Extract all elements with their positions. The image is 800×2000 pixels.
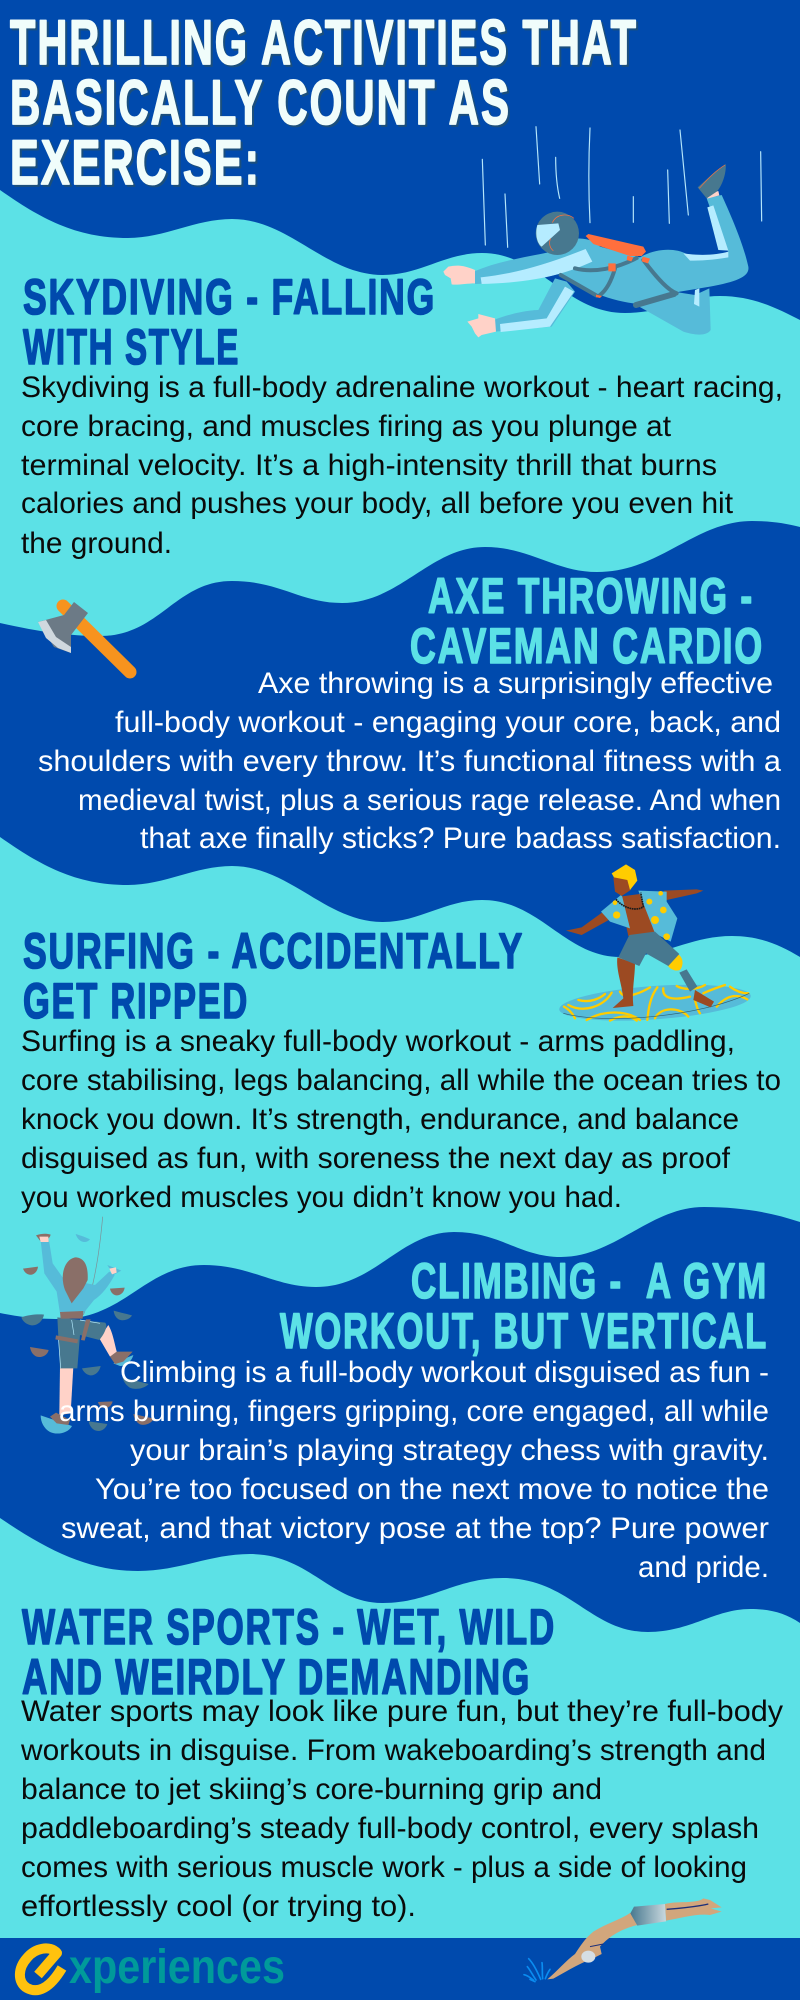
body text: climbing: arms burning, fingers gripping, core engaged, all while xyxy=(59,1395,769,1428)
legs and arms xyxy=(613,957,635,1008)
arm and torso xyxy=(41,1241,115,1313)
body text: water sports: Water sports may look like pure fun, but they’re full-body xyxy=(21,1695,783,1728)
body text: skydiving xyxy=(21,371,783,560)
heading: surfing: GET RIPPED xyxy=(23,973,249,1029)
heading: surfing: SURFING - ACCIDENTALLY xyxy=(23,923,524,979)
body text: axe throwing: full-body workout - engaging your core, back, and xyxy=(115,706,781,739)
body text: surfing: knock you down. It’s strength, endurance, and balance xyxy=(21,1103,739,1136)
heading: skydiving: SKYDIVING - FALLING xyxy=(23,269,436,325)
body text: water sports: balance to jet skiing’s core-burning grip and xyxy=(21,1773,602,1806)
panel: climbing xyxy=(59,1253,769,1584)
title: BASICALLY COUNT AS xyxy=(10,68,511,138)
body text: skydiving: Skydiving is a full-body adrenaline workout - heart racing, xyxy=(21,371,783,404)
body text: climbing xyxy=(59,1356,769,1584)
body text: water sports xyxy=(20,1695,783,1923)
body text: skydiving: calories and pushes your body, all before you even hit xyxy=(21,487,734,520)
swim cap xyxy=(581,1951,595,1963)
shorts xyxy=(618,932,679,966)
surfboard xyxy=(558,979,752,1026)
harness xyxy=(55,1311,91,1343)
helmet xyxy=(536,212,579,255)
panel: skydiving xyxy=(21,269,783,560)
harness xyxy=(561,258,677,305)
illustration: climber xyxy=(21,1217,154,1434)
body text: water sports: effortlessly cool (or trying to). xyxy=(21,1890,416,1923)
body text: axe throwing: shoulders with every throw. It’s functional fitness with a xyxy=(38,745,781,778)
title xyxy=(10,8,638,198)
body text: surfing: core stabilising, legs balancing, all while the ocean tries to xyxy=(21,1064,781,1097)
parachute pack xyxy=(586,234,646,256)
body text: skydiving: terminal velocity. It’s a high-intensity thrill that burns xyxy=(21,449,717,482)
splash xyxy=(524,1959,550,1982)
prosthetic leg xyxy=(667,954,683,971)
body text: surfing: Surfing is a sneaky full-body workout - arms paddling, xyxy=(21,1025,735,1058)
shirt xyxy=(601,891,677,942)
head and hair xyxy=(613,877,631,896)
illustration: diver xyxy=(524,1898,722,1982)
body text: climbing: your brain’s playing strategy chess with gravity. xyxy=(130,1434,769,1467)
heading: water sports: AND WEIRDLY DEMANDING xyxy=(22,1649,531,1705)
body text: water sports: paddleboarding’s steady full-body control, every splash xyxy=(21,1812,759,1845)
hair xyxy=(63,1257,88,1303)
body text: water sports: workouts in disguise. From wakeboarding’s strength and xyxy=(20,1734,766,1767)
body text: climbing: Climbing is a full-body workout disguised as fun - xyxy=(120,1356,769,1389)
title: EXERCISE: xyxy=(10,128,261,198)
panel: axe throwing xyxy=(38,568,781,855)
logo: experiences: xperiences xyxy=(69,1941,285,1994)
legs xyxy=(59,1367,73,1415)
heading: water sports: WATER SPORTS - WET, WILD xyxy=(22,1599,556,1655)
wave band: surfing section background xyxy=(0,837,800,1319)
body text: axe throwing: Axe throwing is a surprisingly effective xyxy=(258,667,773,700)
illustration: skydiver xyxy=(443,127,762,337)
heading: water sports xyxy=(22,1599,556,1705)
icon: axe xyxy=(38,602,130,672)
speed lines xyxy=(482,127,762,247)
panel: water sports xyxy=(20,1599,783,1923)
illustration: surfer xyxy=(558,864,752,1026)
rope xyxy=(83,1217,103,1315)
heading: skydiving xyxy=(23,269,436,375)
hands xyxy=(39,1237,117,1274)
body text: climbing: sweat, and that victory pose at the top? Pure power xyxy=(61,1512,769,1545)
body text: axe throwing: medieval twist, plus a serious rage release. And when xyxy=(78,784,781,817)
body xyxy=(547,1913,637,1979)
body text: climbing: You’re too focused on the next move to notice the xyxy=(95,1473,769,1506)
body text: skydiving: the ground. xyxy=(21,527,172,560)
shorts xyxy=(57,1317,106,1368)
body text: skydiving: core bracing, and muscles firing as you plunge at xyxy=(21,410,672,443)
wave band: skydiving section background xyxy=(0,190,800,636)
shoes xyxy=(110,1352,133,1364)
footer band xyxy=(0,1938,800,2000)
heading: climbing xyxy=(280,1253,768,1359)
body text: axe throwing: that axe finally sticks? Pure badass satisfaction. xyxy=(140,822,781,855)
climbing holds xyxy=(21,1234,154,1434)
heading: axe throwing xyxy=(410,568,764,674)
panel: surfing xyxy=(21,923,781,1214)
heading: skydiving: WITH STYLE xyxy=(23,319,240,375)
body text: climbing: and pride. xyxy=(638,1551,769,1584)
body text: axe throwing xyxy=(38,667,781,855)
boot xyxy=(707,191,719,199)
body text: surfing: you worked muscles you didn’t know you had. xyxy=(21,1181,622,1214)
wave band: water sports section background xyxy=(0,1518,800,1938)
body text: surfing: disguised as fun, with soreness the next day as proof xyxy=(21,1142,731,1175)
heading: surfing xyxy=(23,923,524,1029)
necklace xyxy=(616,893,643,909)
body text: surfing xyxy=(21,1025,781,1214)
torso xyxy=(620,893,655,936)
swim shorts xyxy=(630,1904,666,1926)
body text: water sports: comes with serious muscle work - plus a side of looking xyxy=(21,1851,747,1884)
